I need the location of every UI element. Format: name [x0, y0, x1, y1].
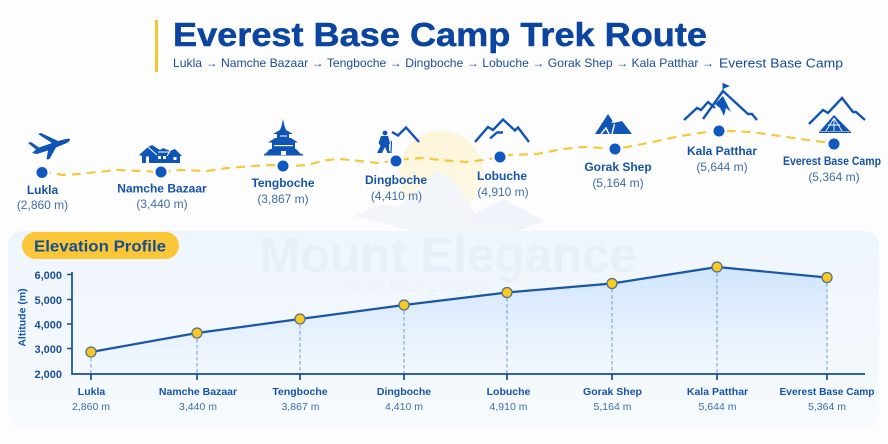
x-axis labels: Gorak Shep [583, 386, 642, 398]
x-axis labels [72, 386, 874, 413]
y-axis label: Altitude (m) [16, 288, 28, 347]
icon: hiker and peaks [383, 131, 387, 135]
axes [72, 272, 865, 380]
icon: mountain range [475, 120, 529, 142]
trail: dashed route line [42, 131, 834, 175]
stop: Kala Patthar: Kala Patthar [687, 144, 757, 158]
stop: Lobuche: (4,910 m) [477, 185, 529, 199]
stop: Everest Base Camp: (5,364 m) [808, 170, 860, 184]
x-axis labels: Namche Bazaar [159, 386, 237, 398]
x-axis labels: 5,364 m [808, 401, 846, 413]
title: Everest Base Camp Trek Route [173, 17, 707, 54]
x-axis labels: 3,867 m [282, 401, 320, 413]
stop: Tengboche: (3,867 m) [257, 192, 309, 206]
x-axis labels: 4,410 m [385, 401, 423, 413]
watermark: sun and mountain [353, 131, 544, 238]
y-axis ticks: 4,000 [34, 320, 62, 332]
x-axis labels: Kala Patthar [687, 386, 748, 398]
route subtitle: Lukla → Namche Bazaar → Tengboche → Dingboche → Lobuche → Gorak Shep → Kala Patthar → [173, 56, 714, 70]
y-axis ticks: 2,000 [34, 369, 62, 381]
elevation line [91, 267, 827, 352]
drop lines [91, 273, 827, 374]
icon: monastery stupa [264, 119, 303, 156]
panel: elevation profile [8, 227, 879, 428]
stop: Tengboche: Tengboche [251, 176, 315, 190]
x-axis labels: 3,440 m [179, 401, 217, 413]
x-axis labels: 2,860 m [72, 401, 110, 413]
y-axis ticks: 6,000 [34, 270, 62, 282]
stop: Dingboche: Dingboche [365, 173, 427, 187]
x-axis labels: Lobuche [487, 386, 531, 398]
stop: Lobuche [475, 120, 529, 199]
x-axis labels: Dingboche [377, 386, 431, 398]
y-axis ticks: 5,000 [34, 295, 62, 307]
heading pill: Elevation Profile [34, 238, 166, 256]
icon: twin peaks [595, 114, 632, 134]
heading pill [22, 232, 179, 259]
stop: Tengboche [251, 119, 315, 206]
data points [86, 262, 832, 357]
icon: mountains and tent [809, 98, 865, 124]
route subtitle: Everest Base Camp [719, 56, 843, 70]
stop: Namche Bazaar [117, 145, 207, 211]
y-axis ticks [34, 270, 72, 381]
stop: Gorak Shep: (5,164 m) [592, 176, 644, 190]
icon: mountains with flag [684, 102, 715, 120]
stop: Gorak Shep: Gorak Shep [584, 160, 652, 174]
stop: Lukla [17, 133, 70, 212]
x-axis labels: 4,910 m [490, 401, 528, 413]
stop: Dingboche [365, 128, 427, 203]
stop: Lukla: (2,860 m) [17, 198, 68, 212]
stop: Lobuche: Lobuche [477, 169, 527, 183]
stop: Namche Bazaar: (3,440 m) [136, 197, 188, 211]
stop: Gorak Shep [584, 113, 652, 190]
stop: Kala Patthar [684, 83, 757, 174]
icon: airplane [28, 133, 70, 160]
watermark: company name: Mount Elegance [259, 227, 637, 283]
x-axis labels: Tengboche [272, 386, 328, 398]
icon: village houses [139, 145, 182, 163]
accent bar [155, 20, 158, 72]
stop: Dingboche: (4,410 m) [371, 189, 422, 203]
watermark: company name: TREKS AND EXPEDITION [343, 279, 493, 295]
stop: Kala Patthar: (5,644 m) [696, 160, 748, 174]
x-axis labels: Lukla [78, 386, 105, 398]
y-axis ticks: 3,000 [34, 344, 62, 356]
x-axis labels: Everest Base Camp [780, 386, 874, 398]
x-axis labels: 5,164 m [594, 401, 632, 413]
area under line [91, 267, 827, 374]
stop: Namche Bazaar: Namche Bazaar [117, 182, 207, 196]
stop: Everest Base Camp [783, 98, 881, 184]
stop: Lukla: Lukla [27, 183, 58, 197]
x-axis labels: 5,644 m [699, 401, 737, 413]
